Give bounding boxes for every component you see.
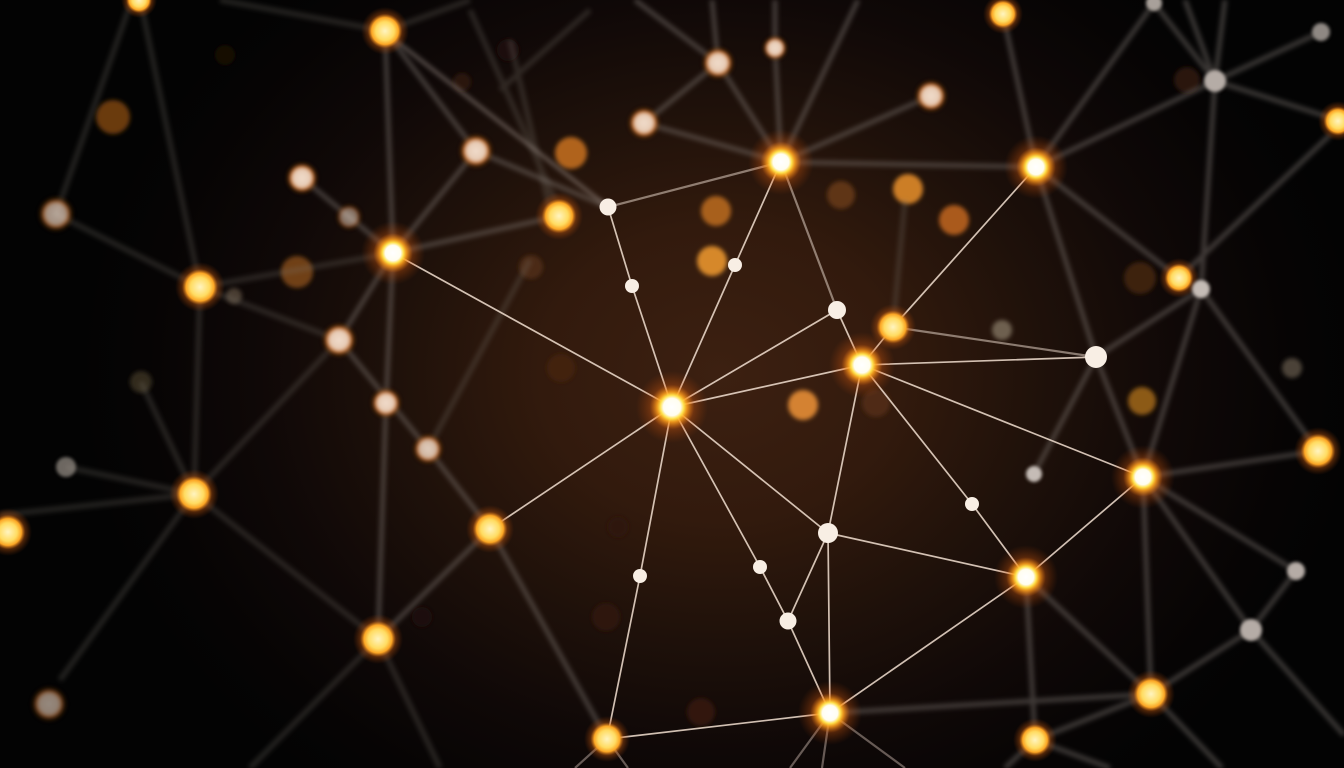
mid-depth connection [395, 40, 608, 207]
softer mid connections [608, 162, 1096, 357]
white junction nodes [600, 198, 1107, 630]
sharp foreground connections [393, 162, 1143, 739]
blurred background connections [302, 0, 1344, 768]
faint far connections [0, 0, 905, 768]
bottom edge connections [575, 713, 905, 768]
hub nodes [361, 129, 1175, 745]
